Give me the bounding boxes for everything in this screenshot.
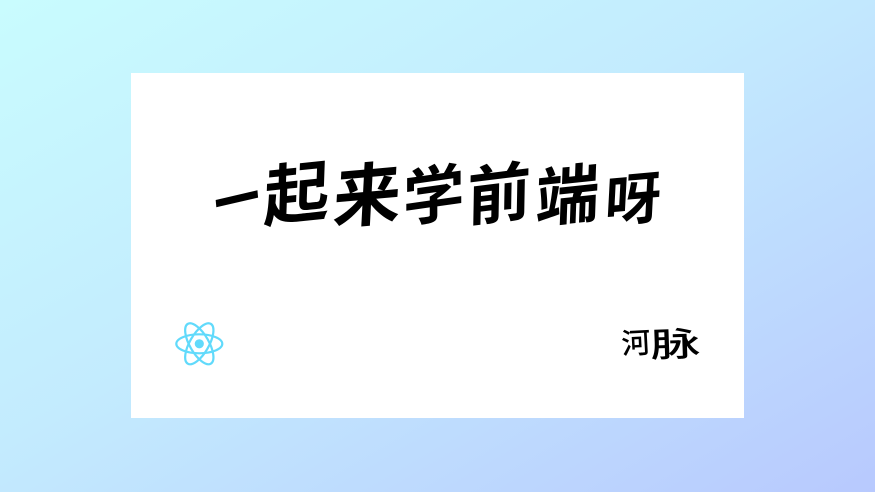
title: 呀 — [603, 166, 662, 234]
panel: white card — [131, 73, 744, 418]
title: 一 — [212, 170, 262, 232]
title: 来 — [331, 156, 403, 238]
author name: 脉 — [650, 325, 701, 364]
title: 学 — [403, 158, 464, 236]
author name — [621, 325, 701, 364]
author name: 河 — [621, 327, 651, 361]
title: 端 — [535, 157, 601, 236]
icon: React logo — [176, 319, 222, 368]
title — [212, 155, 662, 238]
title: 起 — [262, 155, 331, 236]
title: 前 — [467, 155, 532, 235]
